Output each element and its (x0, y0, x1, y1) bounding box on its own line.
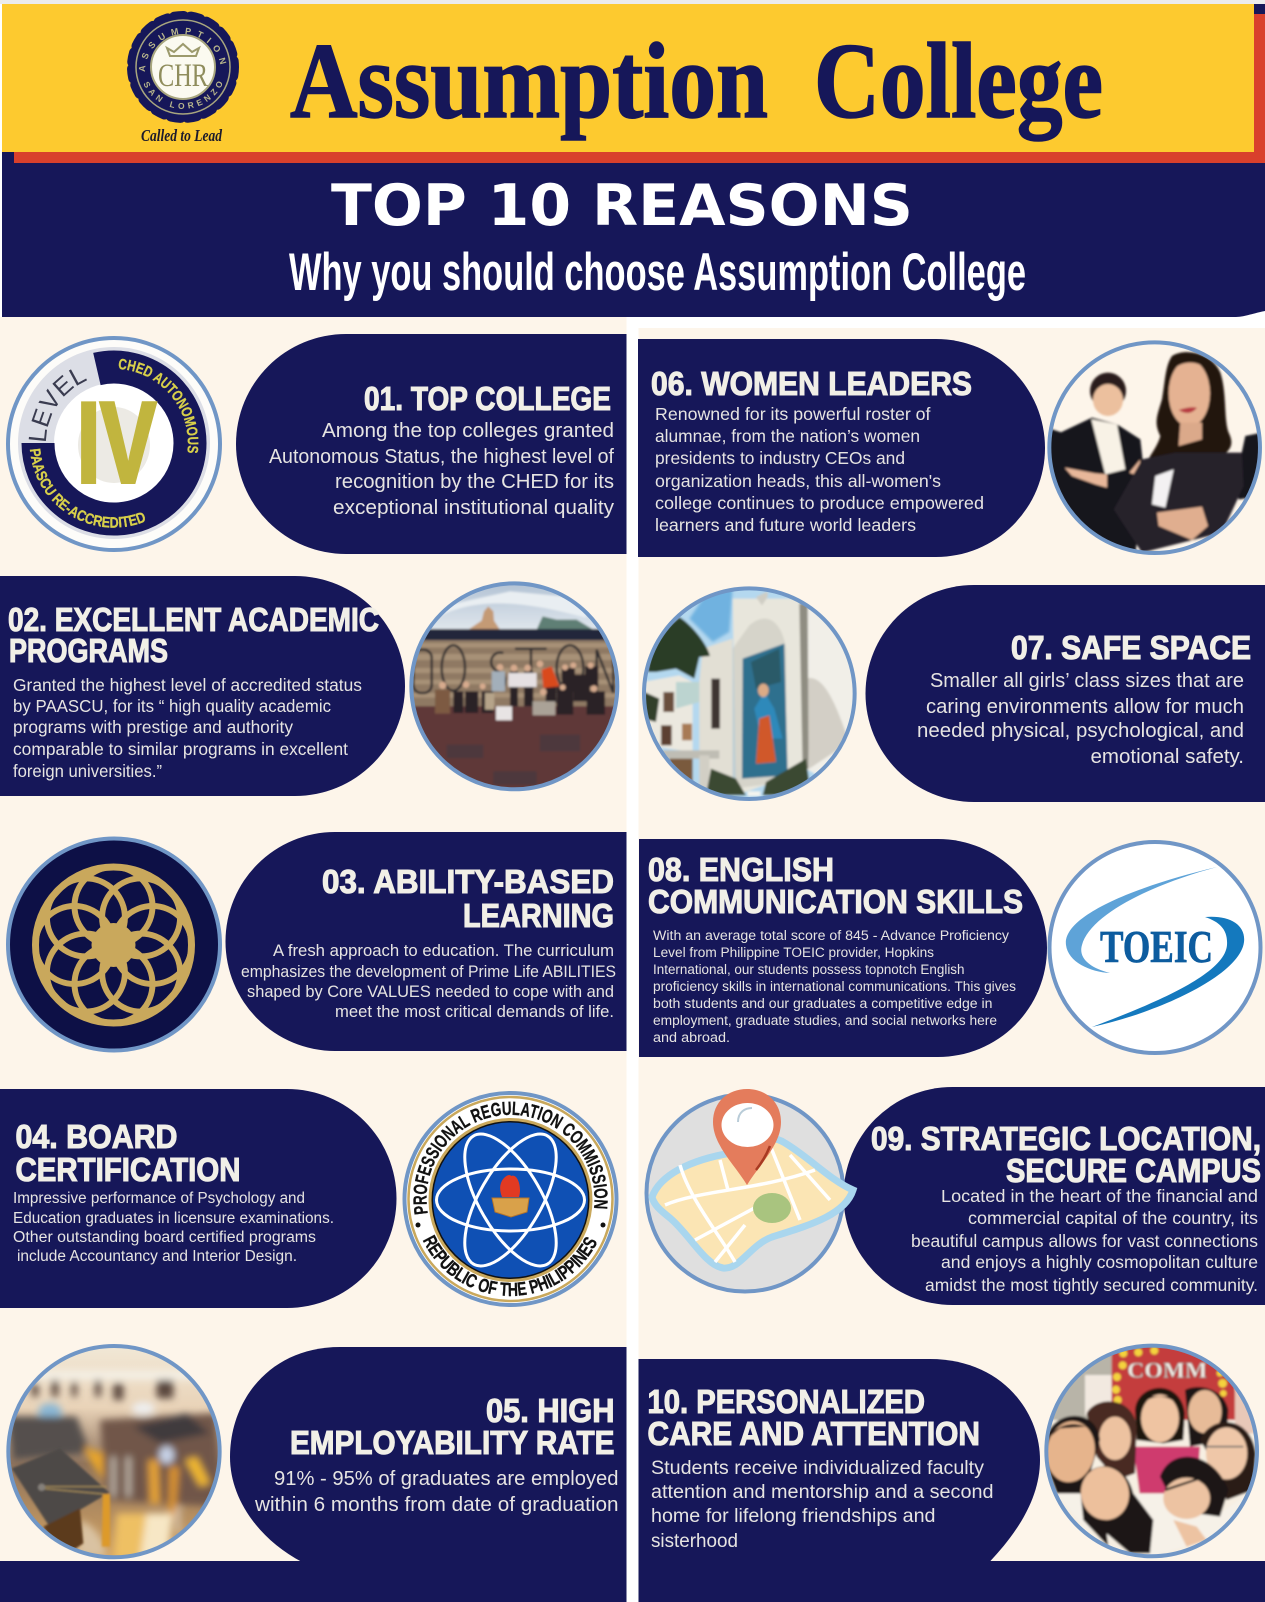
icon: map with location pin (646, 1089, 853, 1292)
pill (638, 339, 1045, 557)
heading: CERTIFICATION (16, 1151, 240, 1188)
icon: college seal: CHR (158, 58, 208, 94)
body text: alumnae, from the nation’s women (655, 426, 920, 446)
badge: level IV accreditation seal: LEVEL (28, 369, 87, 441)
body text: amidst the most tightly secured community. (925, 1275, 1258, 1295)
body text: needed physical, psychological, and (917, 720, 1244, 742)
pill (639, 839, 1047, 1057)
body text: emphasizes the development of Prime Life ABILITIES (241, 963, 616, 981)
heading (290, 1392, 614, 1461)
heading (871, 1120, 1261, 1189)
body text: meet the most critical demands of life. (335, 1003, 614, 1021)
heading: 08. ENGLISH (648, 851, 834, 888)
panel: 06 women leaders (638, 339, 1045, 557)
body text: Autonomous Status, the highest level of (269, 446, 614, 468)
heading (322, 863, 614, 934)
photo: students in Boston (409, 581, 620, 792)
panel: 03 ability-based learning (225, 832, 626, 1051)
pill (844, 1087, 1265, 1305)
body text: employment, graduate studies, and social networks here (653, 1013, 997, 1028)
body text: attention and mentorship and a second (651, 1482, 994, 1503)
body text: comparable to similar programs in excellent (13, 739, 348, 759)
body text: by PAASCU, for its “ high quality academic (13, 696, 331, 716)
heading: COMMUNICATION SKILLS (648, 883, 1023, 920)
body text: exceptional institutional quality (333, 497, 614, 519)
body text (241, 942, 616, 1021)
heading: PROGRAMS (9, 632, 168, 669)
header banner (2, 4, 1265, 317)
body text: organization heads, this all-women's (655, 471, 941, 491)
panel: 10 personalized care and attention (638, 1359, 1040, 1562)
panel: 05 high employability rate (230, 1347, 626, 1562)
body text (917, 670, 1244, 768)
body text (651, 1458, 994, 1552)
panel: 04 board certification (0, 1089, 396, 1308)
body text: proficiency skills in international communications. This gives (653, 979, 1016, 994)
photo: graduates in caps (6, 1344, 222, 1560)
icon: college seal: SAN LORENZO (144, 82, 222, 109)
body text: caring environments allow for much (926, 696, 1244, 718)
body text: A fresh approach to education. The curriculum (273, 942, 614, 960)
body text: and enjoys a highly cosmopolitan culture (941, 1252, 1258, 1272)
cream background: right column (638, 328, 1265, 1602)
body text (911, 1186, 1258, 1295)
heading (8, 601, 379, 669)
body text: include Accountancy and Interior Design. (17, 1248, 297, 1265)
cream background: left column (0, 317, 626, 1602)
badge: level IV accreditation seal: IV (77, 380, 156, 507)
heading: LEARNING (463, 897, 614, 934)
body text: 91% - 95% of graduates are employed (274, 1468, 618, 1490)
heading: 01. TOP COLLEGE (364, 380, 611, 417)
body text (269, 420, 614, 519)
logo: TOEIC (1050, 842, 1260, 1053)
body text: learners and future world leaders (655, 515, 916, 535)
heading: 06. WOMEN LEADERS (651, 365, 972, 402)
body text: Impressive performance of Psychology and (13, 1190, 305, 1207)
navy corner (1250, 4, 1265, 16)
body text: recognition by the CHED for its (335, 471, 614, 493)
badge: professional regulation commission seal: PROFESSIONAL REGULATION COMMISSION (413, 1102, 608, 1215)
body text: commercial capital of the country, its (968, 1208, 1258, 1228)
badge: level IV accreditation seal: PAASCU RE-ACCREDITED (30, 448, 145, 528)
heading (648, 1383, 980, 1452)
body text: programs with prestige and authority (13, 717, 293, 737)
body text: International, our students possess topnotch English (653, 962, 964, 977)
body text: Renowned for its powerful roster of (655, 404, 931, 424)
pill (225, 832, 626, 1051)
panel: 09 strategic location, secure campus (844, 1087, 1265, 1305)
heading (16, 1118, 240, 1188)
photo: group of students (1040, 1340, 1265, 1567)
body text: Granted the highest level of accredited status (13, 675, 362, 695)
body text (254, 1468, 618, 1516)
photo: group of students: COMM (1127, 1357, 1207, 1382)
body text: Students receive individualized faculty (651, 1458, 985, 1479)
pill (638, 1359, 1040, 1562)
badge: level IV accreditation seal (6, 336, 222, 552)
pill (0, 1089, 396, 1308)
heading: 03. ABILITY-BASED (322, 863, 614, 900)
icon: college seal: ASSUMPTION (138, 28, 226, 72)
icon: gold rosette (8, 838, 220, 1050)
body text (653, 928, 1016, 1045)
body text: both students and our graduates a competitive edge in (653, 996, 992, 1011)
body text: shaped by Core VALUES needed to cope with and (247, 983, 614, 1001)
heading: 05. HIGH (486, 1392, 614, 1429)
body text: and abroad. (653, 1030, 730, 1045)
subtitle: top 10 reasons: TOP 10 REASONS (331, 173, 913, 239)
motto: Called to Lead (141, 126, 222, 145)
photo: campus building with stained glass (642, 586, 857, 801)
pill (230, 1347, 626, 1562)
body text: Smaller all girls’ class sizes that are (930, 670, 1244, 692)
title: College (814, 22, 1103, 141)
body text: presidents to industry CEOs and (655, 448, 905, 468)
body text: beautiful campus allows for vast connections (911, 1231, 1258, 1251)
heading (648, 851, 1023, 920)
heading: 02. EXCELLENT ACADEMIC (8, 601, 379, 638)
badge: professional regulation commission seal: REPUBLIC OF THE PHILIPPINES (422, 1234, 596, 1296)
footer bar left (0, 1561, 626, 1602)
body text: emotional safety. (1090, 746, 1244, 768)
title (290, 22, 1103, 141)
title: Assumption (290, 22, 768, 141)
pill (866, 585, 1265, 802)
body text: within 6 months from date of graduation (254, 1494, 618, 1516)
heading: 10. PERSONALIZED (648, 1383, 925, 1420)
body text (13, 675, 362, 781)
panel: 02 excellent academic programs (0, 576, 405, 796)
panel: 01 top college (236, 334, 626, 554)
red accent band (14, 14, 1265, 163)
footer bar right (638, 1561, 1265, 1602)
body text: Other outstanding board certified programs (13, 1229, 316, 1246)
body text: Located in the heart of the financial and (941, 1186, 1258, 1206)
navy header panel (2, 152, 1265, 317)
body text (655, 404, 984, 535)
icon: college seal (127, 11, 239, 123)
pill (236, 334, 626, 554)
badge: level IV accreditation seal: CHED AUTONOMOUS (118, 358, 198, 453)
badge: professional regulation commission seal (402, 1091, 618, 1307)
photo: women leaders (1042, 336, 1265, 563)
body text: Level from Philippine TOEIC provider, Hopkins (653, 945, 934, 960)
body text: college continues to produce empowered (655, 493, 984, 513)
body text: home for lifelong friendships and (651, 1506, 936, 1527)
body text: Among the top colleges granted (322, 420, 614, 442)
heading: 04. BOARD (16, 1118, 178, 1155)
pill (0, 576, 405, 796)
panel: 08 english communication skills (639, 839, 1047, 1057)
logo: TOEIC: TOEIC (1100, 921, 1213, 972)
heading: CARE AND ATTENTION (648, 1415, 980, 1452)
body text: Education graduates in licensure examinations. (13, 1210, 334, 1227)
body text: With an average total score of 845 - Advance Proficiency (653, 928, 1009, 943)
body text: foreign universities.” (13, 761, 162, 781)
heading: EMPLOYABILITY RATE (290, 1424, 614, 1461)
body text (13, 1190, 334, 1265)
top strip (0, 0, 1265, 4)
body text: sisterhood (651, 1531, 738, 1552)
yellow banner (2, 4, 1254, 152)
panel: 07 safe space (866, 585, 1265, 802)
